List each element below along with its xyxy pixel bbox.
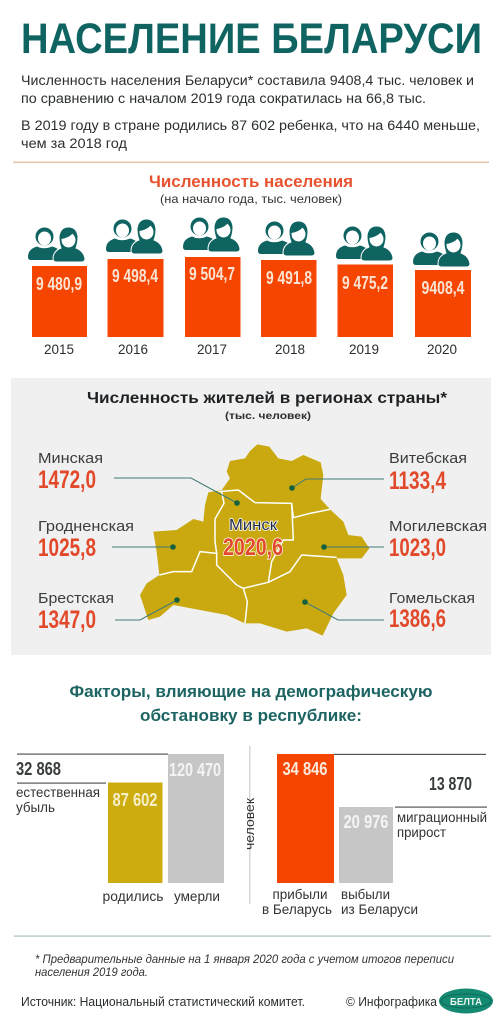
- label: migration gain: [397, 810, 487, 840]
- column 2017: [183, 217, 240, 357]
- label: migration gain: прирост: [397, 825, 446, 840]
- intro text: [21, 73, 480, 151]
- intro text: Численность населения Беларуси* составила 9408,4 тыс. человек и: [21, 73, 474, 88]
- region: Hrodna: 1025,8: [38, 534, 96, 562]
- heading: factors: [70, 682, 432, 725]
- column 2020: 2020: [427, 342, 457, 357]
- intro text: чем за 2018 год: [21, 136, 127, 151]
- label: natural decrease: убыль: [16, 800, 55, 815]
- region: Mogilev: [321, 518, 487, 562]
- bar: departed: 20 976: [344, 812, 388, 832]
- region: Brest: Брестская: [38, 590, 114, 607]
- region: Minskaya: Минская: [38, 450, 103, 467]
- column 2016: 2016: [118, 342, 148, 357]
- region: Minsk city: Минск: [229, 517, 278, 534]
- region: Mogilev: Могилевская: [389, 518, 487, 535]
- column 2020: [413, 232, 471, 357]
- column 2017: 2017: [197, 342, 227, 357]
- intro text: по сравнению с началом 2019 года сократилась на 66,8 тыс.: [21, 91, 426, 106]
- region: Hrodna: [38, 518, 176, 562]
- label: died: умерли: [174, 889, 220, 904]
- credit: © Инфографика: [346, 994, 438, 1009]
- footnote: * Предварительные данные на 1 января 2020 года с учетом итогов переписи: [35, 954, 455, 966]
- column 2019: 2019: [349, 342, 379, 357]
- heading: population: (на начало года, тыс. человек): [160, 192, 342, 206]
- column 2018: 2018: [275, 342, 305, 357]
- bar: born: [108, 782, 162, 883]
- label: departed: выбыли: [341, 887, 390, 902]
- value: natural decrease: 32 868: [16, 759, 61, 779]
- column 2018: [258, 221, 316, 357]
- column 2020: 9408,4: [422, 278, 464, 298]
- region: Gomel: [302, 590, 475, 633]
- region: Minsk city: [223, 517, 283, 561]
- heading: factors: обстановку в республике:: [140, 706, 362, 725]
- chart: migration: [262, 754, 487, 917]
- heading: regions: Численность жителей в регионах страны*: [87, 390, 448, 407]
- heading: regions: (тыс. человек): [225, 410, 311, 422]
- logo: BelTA: БЕЛТА: [450, 997, 482, 1008]
- footnote: населения 2019 года.: [35, 967, 148, 979]
- label: arrived: в Беларусь: [262, 902, 332, 917]
- region: Vitebsk: [289, 450, 467, 495]
- footnote: [35, 954, 455, 979]
- region: Hrodna: Гродненская: [38, 518, 134, 535]
- bar: died: 120 470: [169, 760, 221, 780]
- label: migration gain: миграционный: [397, 810, 487, 825]
- region: Vitebsk: Витебская: [389, 450, 467, 467]
- column 2017: 9 504,7: [189, 264, 235, 284]
- region: Mogilev: 1023,0: [389, 534, 446, 562]
- bar: arrived: [277, 754, 334, 883]
- column 2015: 2015: [44, 342, 74, 357]
- column 2015: [28, 227, 87, 357]
- chart: natural decrease: [16, 754, 224, 904]
- label: natural decrease: естественная: [16, 785, 100, 800]
- axis label: people: человек: [242, 798, 257, 850]
- column 2018: 9 491,8: [266, 268, 312, 288]
- value: migration gain: 13 870: [429, 774, 472, 794]
- region: Vitebsk: 1133,4: [389, 467, 446, 495]
- region: Minsk city: 2020,6: [223, 534, 283, 561]
- label: born: родились: [102, 889, 164, 904]
- heading: factors: Факторы, влияющие на демографическую: [70, 682, 432, 701]
- region: Gomel: 1386,6: [389, 605, 446, 633]
- map of Belarus: [140, 444, 369, 636]
- column 2016: 9 498,4: [112, 266, 158, 286]
- label: arrived: [262, 887, 332, 917]
- region: Brest: [38, 590, 180, 634]
- source: Источник: Национальный статистический комитет.: [21, 994, 305, 1009]
- intro text: В 2019 году в стране родились 87 602 ребенка, что на 6440 меньше,: [21, 118, 480, 133]
- label: arrived: прибыли: [272, 887, 328, 902]
- heading: population: Численность населения: [149, 172, 353, 191]
- column 2019: [336, 226, 393, 357]
- logo: BelTA: [439, 988, 493, 1014]
- heading: regions: [87, 390, 448, 422]
- heading: population: [149, 172, 353, 206]
- region: Minskaya: [38, 450, 240, 506]
- column 2015: 9 480,9: [36, 274, 82, 294]
- column 2019: 9 475,2: [342, 273, 388, 293]
- population chart: [28, 217, 471, 357]
- bar: arrived: 34 846: [282, 759, 328, 779]
- region: Gomel: Гомельская: [389, 590, 475, 607]
- region: Brest: 1347,0: [38, 606, 96, 634]
- label: departed: из Беларуси: [341, 902, 418, 917]
- region: Minskaya: 1472,0: [38, 466, 96, 494]
- bar: died: [168, 754, 224, 883]
- panel: regions: [11, 378, 491, 655]
- bar: born: 87 602: [112, 790, 158, 810]
- column 2016: [106, 219, 164, 357]
- bar: departed: [339, 807, 393, 883]
- label: departed: [341, 887, 418, 917]
- label: natural decrease: [16, 785, 100, 815]
